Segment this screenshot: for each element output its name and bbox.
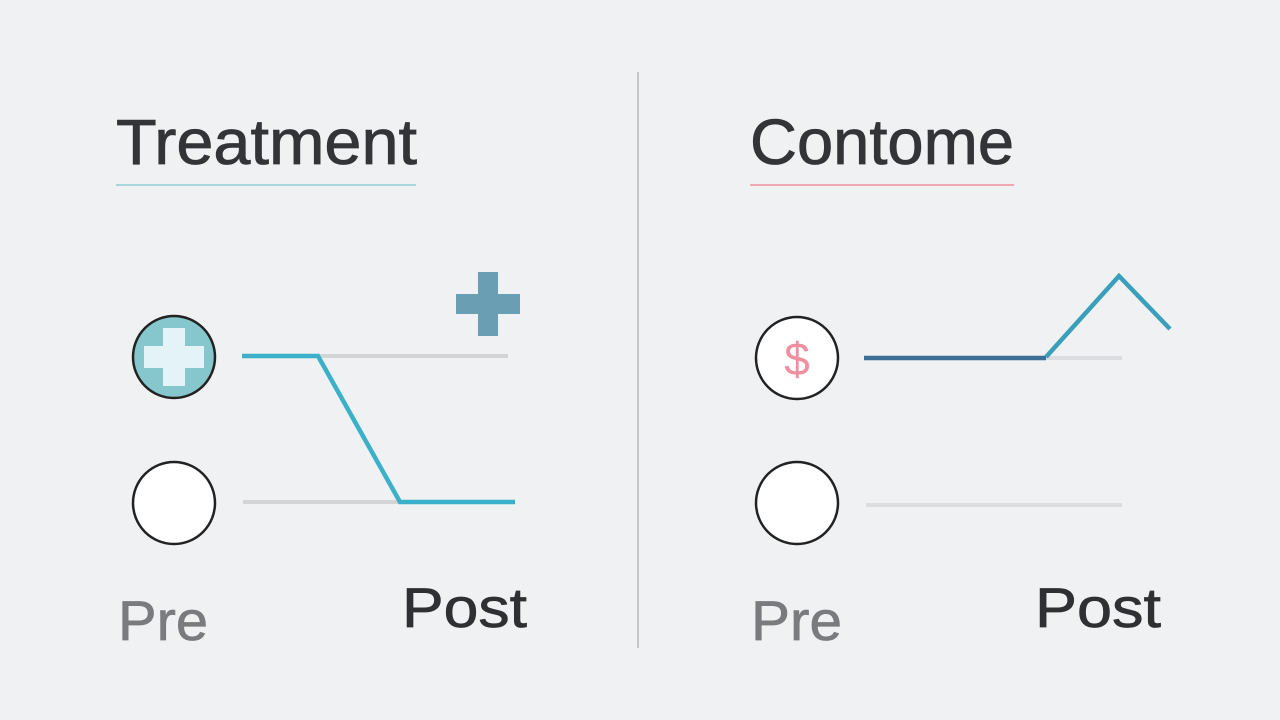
label: Post: Post — [1035, 576, 1161, 639]
chart: treatment line — [242, 356, 515, 502]
panel: outcome — [750, 106, 1170, 652]
icon: dollar circle: $ — [784, 333, 810, 385]
chart: outcome line — [864, 276, 1170, 505]
heading: Treatment: Treatment — [116, 106, 417, 178]
icon: dollar circle — [756, 317, 838, 399]
icon: empty circle — [133, 462, 215, 544]
icon: empty circle — [756, 462, 838, 544]
icon: plus sign — [456, 272, 520, 336]
label: Pre: Pre — [118, 589, 208, 652]
icon: plus circle — [133, 316, 215, 398]
label: Pre: Pre — [751, 589, 842, 652]
heading: Contome: Contome — [750, 106, 1014, 178]
panel: treatment — [116, 106, 527, 652]
label: Post: Post — [402, 576, 527, 639]
